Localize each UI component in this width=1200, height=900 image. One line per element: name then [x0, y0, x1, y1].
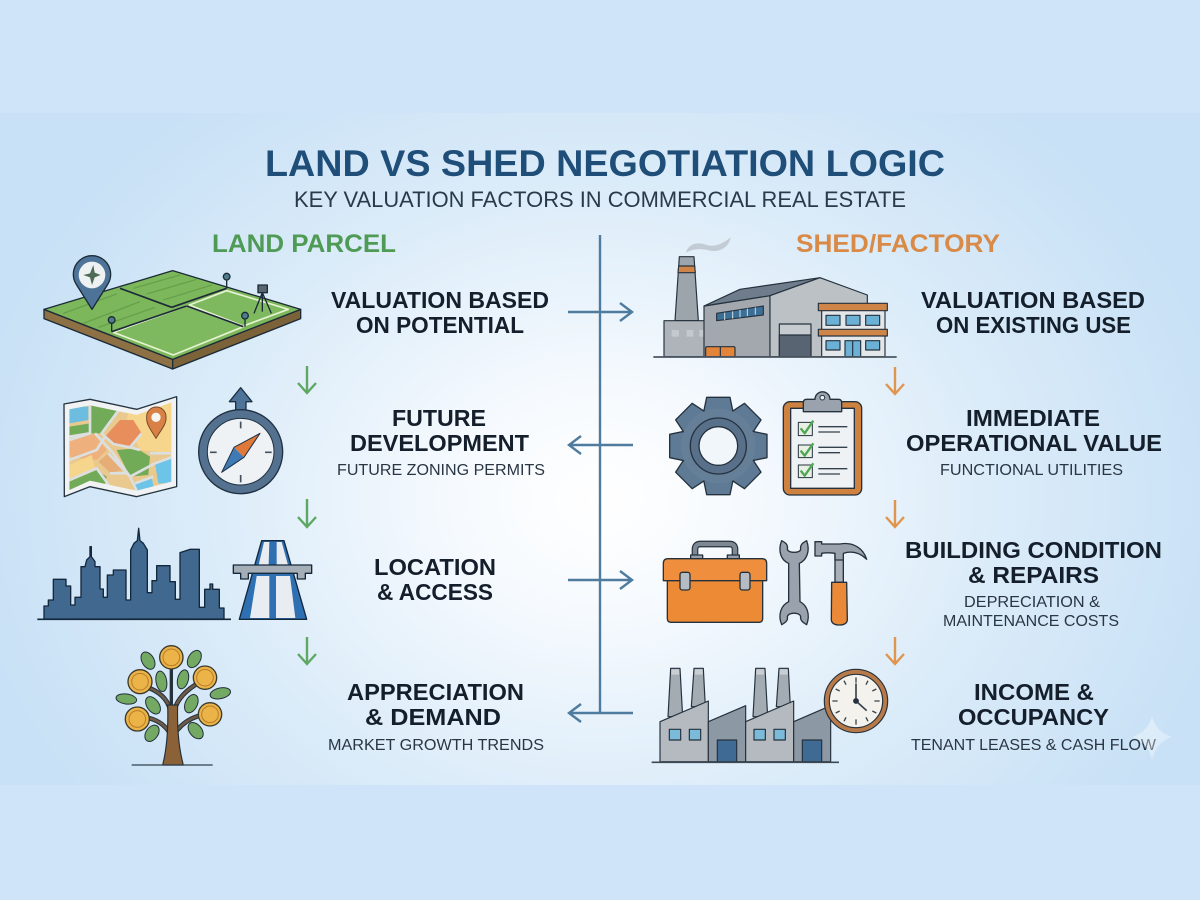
left row 4 text [328, 679, 544, 754]
right row 3 text: MAINTENANCE COSTS [943, 613, 1119, 630]
right row 2 text: OPERATIONAL VALUE [906, 430, 1162, 456]
icon: compass [199, 388, 283, 494]
icon: land parcel [44, 256, 301, 369]
left row 2 text: FUTURE ZONING PERMITS [337, 462, 545, 479]
right row 4 text: INCOME & [974, 679, 1094, 705]
left row 4 text: APPRECIATION [347, 679, 524, 705]
icon: factories with clock [652, 668, 888, 762]
right row 1 text [921, 287, 1145, 338]
left row 2 text: FUTURE [392, 405, 486, 431]
right row 4 text [911, 679, 1157, 754]
title: LAND VS SHED NEGOTIATION LOGIC [265, 143, 945, 184]
sparkle watermark [1132, 716, 1172, 760]
left row 1 text: ON POTENTIAL [356, 312, 524, 338]
right row 3 text: DEPRECIATION & [964, 594, 1100, 611]
right row 3 text: BUILDING CONDITION [905, 537, 1162, 563]
heading: shed/factory: SHED/FACTORY [796, 230, 1000, 258]
icon: map [64, 397, 177, 497]
icon: toolbox [663, 544, 767, 622]
left row 2 text: DEVELOPMENT [350, 430, 529, 456]
right row 2 text [906, 405, 1162, 479]
subtitle: KEY VALUATION FACTORS IN COMMERCIAL REAL ESTATE [294, 187, 906, 212]
left row 3 text [374, 554, 496, 605]
icon: wrench [780, 541, 808, 625]
orange flow arrows [886, 367, 904, 664]
green flow arrows [298, 366, 316, 664]
right row 1 text: VALUATION BASED [921, 287, 1145, 313]
left row 2 text [337, 405, 545, 479]
left row 3 text: & ACCESS [377, 579, 493, 605]
right row 3 text [905, 537, 1162, 630]
icon: city skyline [37, 528, 231, 619]
icon: money tree [115, 646, 232, 765]
icon: gear [670, 397, 767, 495]
icon: clipboard checklist [783, 392, 862, 495]
right row 1 text: ON EXISTING USE [936, 312, 1131, 338]
right row 4 text: TENANT LEASES & CASH FLOW [911, 737, 1157, 754]
icon: hammer [815, 542, 867, 625]
left row 1 text [331, 287, 549, 338]
right row 2 text: IMMEDIATE [966, 405, 1100, 431]
right row 3 text: & REPAIRS [968, 562, 1099, 588]
right row 2 text: FUNCTIONAL UTILITIES [940, 462, 1123, 479]
left row 1 text: VALUATION BASED [331, 287, 549, 313]
left row 4 text: MARKET GROWTH TRENDS [328, 737, 544, 754]
left row 4 text: & DEMAND [365, 704, 501, 730]
central divider with branch arrows [568, 235, 633, 722]
left row 3 text: LOCATION [374, 554, 496, 580]
heading: land parcel: LAND PARCEL [212, 230, 396, 258]
icon: highway overpass [233, 541, 312, 619]
right row 4 text: OCCUPANCY [958, 704, 1109, 730]
icon: factory with chimney [653, 237, 897, 357]
